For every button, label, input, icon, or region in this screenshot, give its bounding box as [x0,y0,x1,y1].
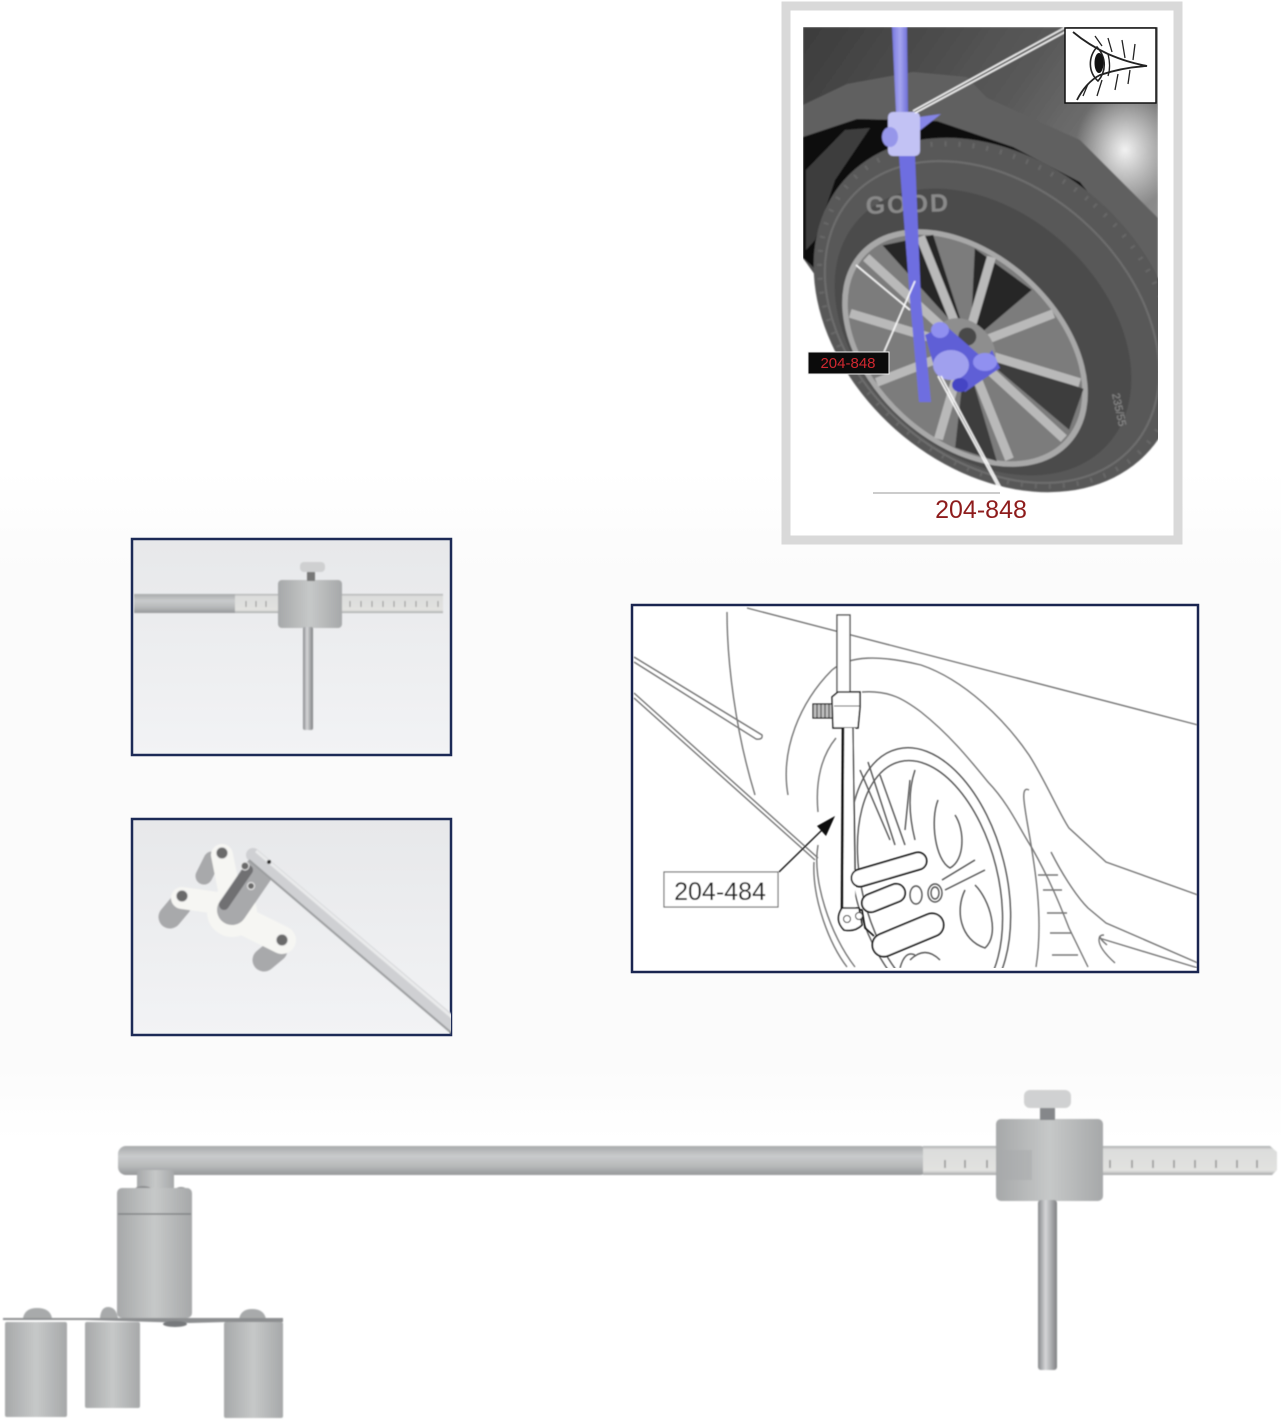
central post [224,870,258,910]
column body [117,1188,192,1318]
long rod [249,851,460,1036]
photo: car wheel and fender [803,27,1158,494]
base plate [3,1318,283,1327]
sliding collar [278,580,342,628]
pivot stem [137,1170,174,1190]
alloy rim [841,228,1089,468]
label: 204-484 [664,872,778,907]
thumb screw [1024,1090,1071,1120]
wheel rim lines [854,746,1012,968]
scale bar [923,1146,1277,1175]
rod [118,1146,928,1175]
screws [176,847,288,946]
rod with scale [134,594,443,613]
tool drawing [813,615,932,945]
panel: tripod foot detail photo [132,819,460,1036]
panel: wheel photo with blue-highlighted tool [782,2,1182,544]
pointer pin [1038,1200,1057,1370]
top screws [135,1186,187,1193]
leader lines [856,27,1067,490]
foot cylinders [5,1322,283,1418]
tyre [812,136,1158,494]
blue tool: rod, collar and hub [882,27,1000,402]
label: red 204-848: 204-848 [935,496,1027,524]
tyre: GOOD [865,189,951,220]
label: 204-484: 204-484 [674,878,766,906]
car body lines [634,608,1198,968]
pointer pin [303,627,313,730]
panel: slider detail photo [132,539,451,755]
panel: line drawing of tool on wheel [630,604,1200,974]
thumb screw [300,562,325,581]
dome screws [23,1307,266,1319]
label: black tag 204-848 [808,352,889,374]
label: black tag 204-848: 204-848 [820,355,876,372]
icon: eye viewing direction [1065,28,1156,103]
sliding collar [996,1119,1103,1201]
tyre: 235/55 [1109,392,1128,428]
arrow [779,816,835,872]
feet cylinders [170,860,276,960]
white mounting plate [182,855,282,940]
main tool: full assembly photo [3,1090,1277,1418]
